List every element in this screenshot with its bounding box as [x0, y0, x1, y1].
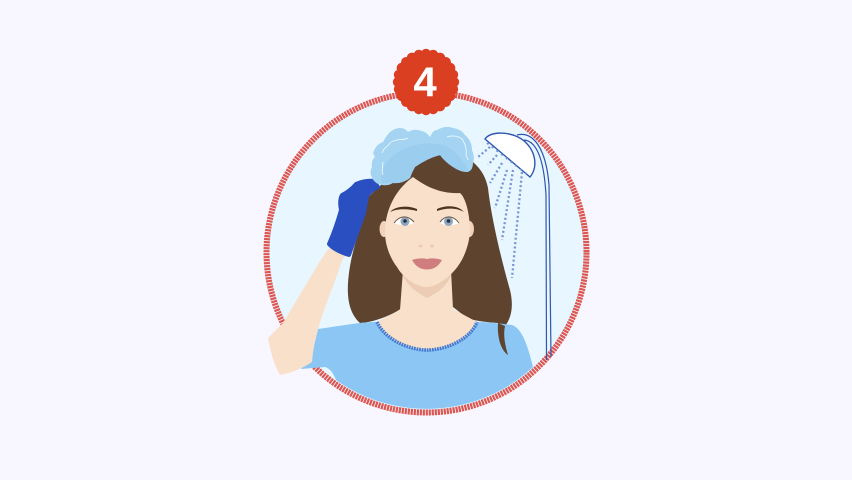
woman [268, 127, 533, 409]
mouth [412, 258, 442, 270]
badge scalloped shape [393, 49, 459, 115]
nose [418, 245, 434, 247]
face [385, 177, 470, 287]
foam [370, 127, 474, 185]
ears [380, 221, 388, 237]
glove [329, 181, 378, 255]
badge number: 4 [413, 58, 437, 106]
ring [266, 92, 586, 412]
circle background [268, 94, 586, 412]
hair [348, 155, 512, 326]
shirt collar [377, 322, 477, 350]
eyes [394, 217, 459, 226]
neck shadow [403, 266, 451, 298]
eyebrows [390, 206, 464, 212]
arm [268, 248, 349, 375]
neck [377, 270, 477, 350]
foam highlights [382, 136, 468, 175]
shower head [485, 133, 535, 177]
shower pipe [517, 134, 551, 360]
number badge [393, 49, 459, 115]
foam shading [381, 143, 468, 183]
water spray [478, 147, 522, 278]
shirt [301, 322, 533, 409]
shower head rim [487, 143, 528, 175]
shower [478, 133, 551, 360]
hair lock over shirt [498, 323, 508, 355]
